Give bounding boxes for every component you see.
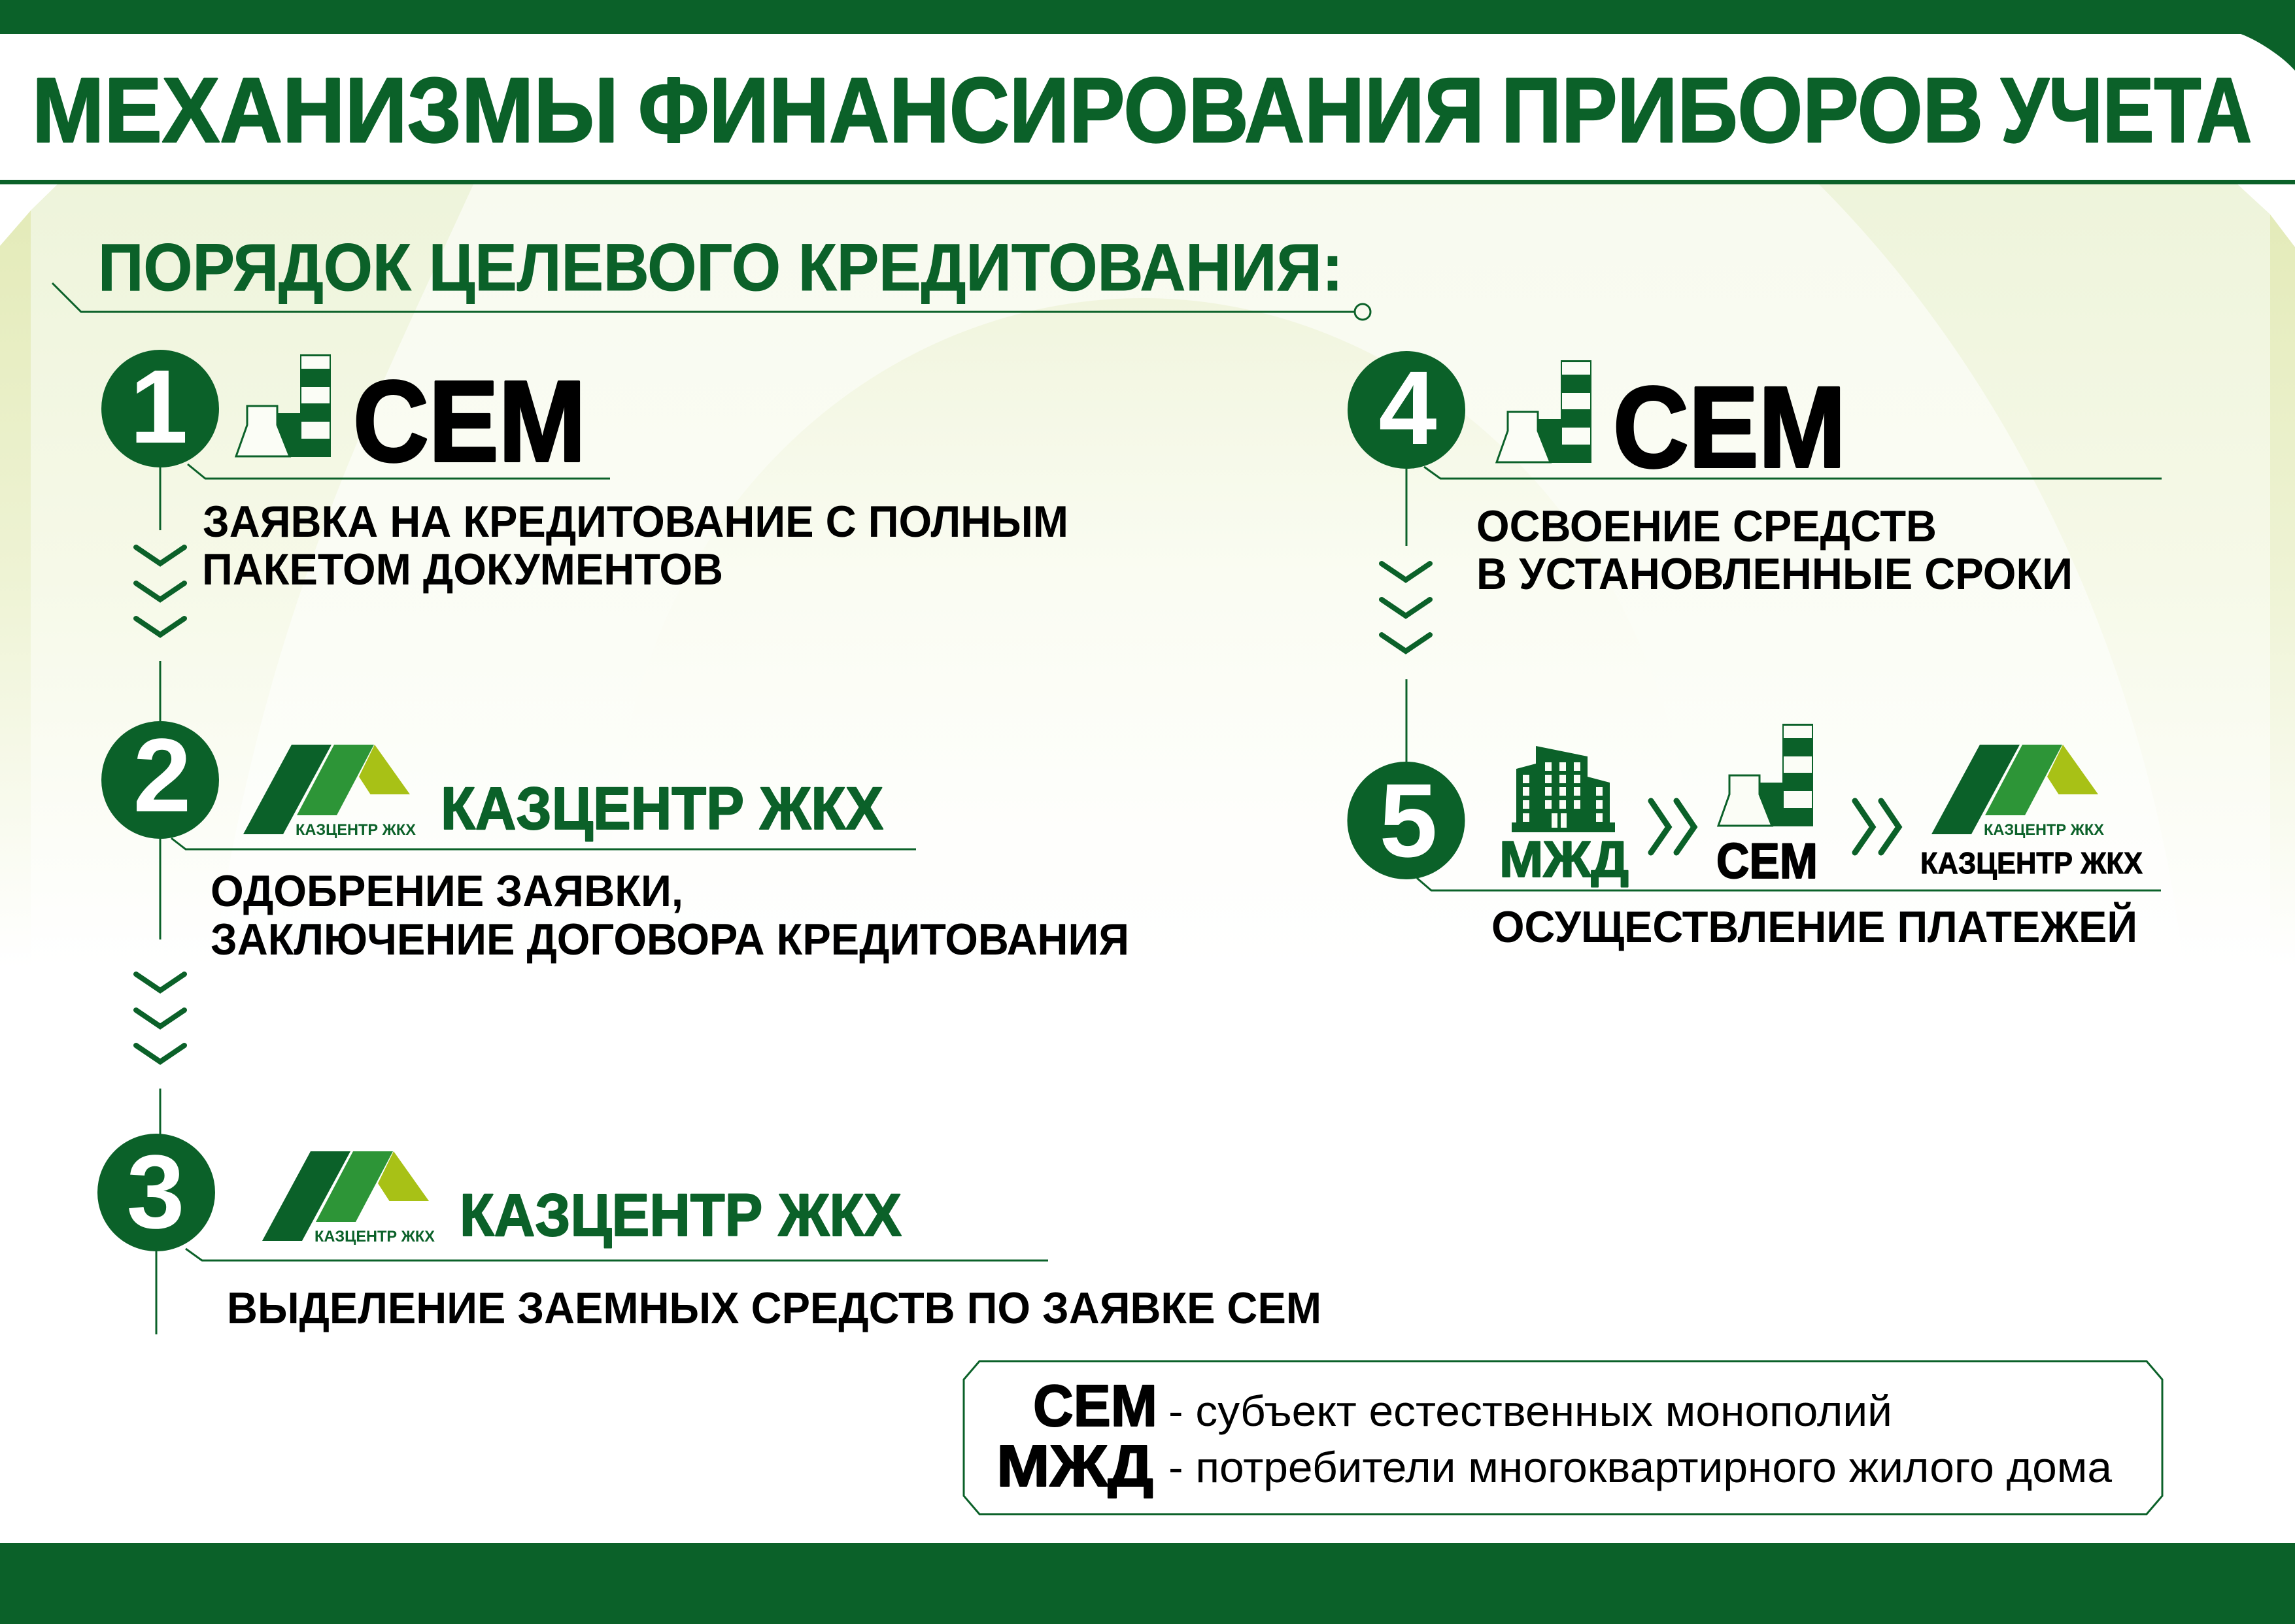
step 5: 5 — [1380, 762, 1437, 879]
step 5 — [1347, 724, 2161, 952]
logo: Казцентр ЖКХ — [1931, 745, 2104, 839]
arrow — [1855, 801, 1899, 853]
header rule — [0, 180, 2295, 184]
legend box: - субъект естественных монополий — [1168, 1387, 1892, 1435]
subheading: ПОРЯДОК ЦЕЛЕВОГО КРЕДИТОВАНИЯ: — [98, 230, 1343, 305]
legend box: - потребители многоквартирного жилого дома — [1168, 1443, 2112, 1491]
step 4: СЕМ — [1613, 364, 1846, 492]
label: Казцентр ЖКХ: КАЗЦЕНТР ЖКХ — [1920, 846, 2143, 880]
arrow — [1651, 801, 1694, 853]
step 2: ОДОБРЕНИЕ ЗАЯВКИ, — [211, 866, 683, 916]
step 2: ЗАКЛЮЧЕНИЕ ДОГОВОРА КРЕДИТОВАНИЯ — [211, 915, 1129, 964]
background arcs — [0, 184, 2295, 968]
step 2: КАЗЦЕНТР ЖКХ — [441, 775, 883, 842]
top bar — [0, 0, 2295, 71]
label: МЖД: МЖД — [1499, 830, 1629, 888]
icon: apartment buildings — [1512, 746, 1615, 832]
step 2 — [101, 717, 1129, 1138]
title: ПРИБОРОВ — [1501, 58, 1983, 161]
step 4: В УСТАНОВЛЕННЫЕ СРОКИ — [1476, 549, 2073, 599]
icon: factory — [1718, 724, 1813, 826]
step 3: 3 — [127, 1133, 184, 1250]
step 1: ПАКЕТОМ ДОКУМЕНТОВ — [202, 545, 723, 594]
step 1: СЕМ — [353, 358, 586, 486]
label: СЕМ: СЕМ — [1716, 834, 1818, 889]
step 3: ВЫДЕЛЕНИЕ ЗАЕМНЫХ СРЕДСТВ ПО ЗАЯВКЕ СЕМ — [227, 1283, 1321, 1333]
bottom bar — [0, 1543, 2295, 1624]
step 3: КАЗЦЕНТР ЖКХ — [460, 1182, 902, 1249]
title: УЧЕТА — [2001, 58, 2252, 161]
step 4 — [1348, 349, 2162, 762]
legend box: СЕМ — [1033, 1374, 1157, 1439]
legend box: МЖД — [996, 1434, 1153, 1499]
legend box — [964, 1361, 2162, 1514]
step 2: 2 — [133, 717, 191, 834]
step 1: 1 — [130, 348, 188, 465]
title: МЕХАНИЗМЫ — [32, 58, 619, 161]
step 4: ОСВОЕНИЕ СРЕДСТВ — [1476, 501, 1937, 551]
step 1: ЗАЯВКА НА КРЕДИТОВАНИЕ С ПОЛНЫМ — [203, 497, 1068, 547]
title: ФИНАНСИРОВАНИЯ — [638, 58, 1484, 161]
title — [32, 58, 2252, 161]
step 3 — [97, 1133, 1321, 1334]
step 4: 4 — [1379, 349, 1437, 466]
step 1 — [101, 348, 1068, 721]
step 5: ОСУЩЕСТВЛЕНИЕ ПЛАТЕЖЕЙ — [1491, 902, 2137, 952]
